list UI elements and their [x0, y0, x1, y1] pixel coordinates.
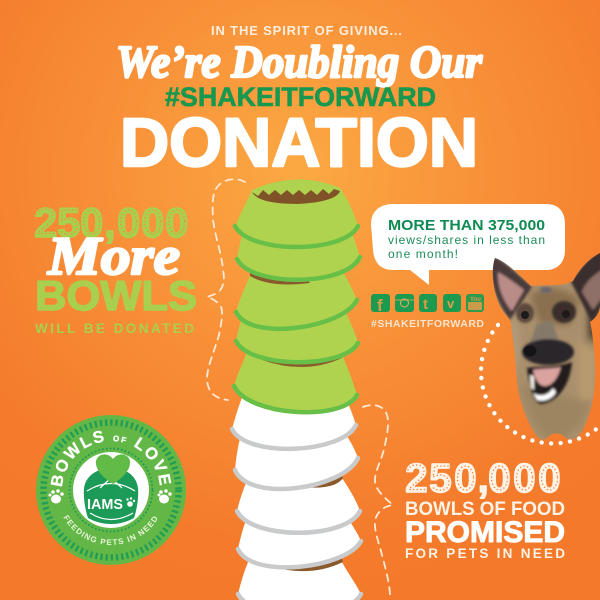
- badge dotted ring: [70, 448, 152, 532]
- logo wordmark: IAMS: [87, 497, 123, 513]
- logo bowl: [84, 468, 138, 524]
- icon: facebook: f: [377, 296, 383, 315]
- right stat: 250,000 bowls promised: [405, 455, 565, 561]
- icon: tumblr: t: [423, 296, 428, 313]
- food in bowl 5: [262, 350, 342, 367]
- badge white centre: [73, 452, 149, 528]
- speech bubble: [371, 204, 565, 285]
- dog eyes and nose: [521, 310, 570, 356]
- left stat caption: WILL BE DONATED: [35, 321, 194, 336]
- dog ears: [491, 250, 600, 322]
- badge tick ring: [44, 422, 178, 558]
- left stat number: 250,000: [34, 199, 188, 246]
- bubble shape: [371, 204, 565, 285]
- green bowl 2: [237, 228, 360, 280]
- hashtag under icons: #SHAKEITFORWARD: [371, 318, 484, 330]
- icon: vine: v: [447, 296, 455, 311]
- food in bowl 1: [252, 189, 340, 204]
- logo bowl lines: [86, 480, 136, 520]
- dog base coat: [492, 253, 600, 440]
- badge disc: [36, 415, 186, 565]
- dog mouth: [527, 362, 572, 404]
- white bowl 10: [238, 562, 361, 600]
- food in bowl 10: [270, 552, 343, 571]
- logo paw: [126, 497, 135, 507]
- white bowl 6: [232, 395, 356, 449]
- photo: german shepherd dog: [492, 253, 600, 440]
- title: donation: DONATION: [120, 104, 478, 181]
- logo bowl body: [84, 468, 138, 524]
- green bowl 1: [235, 179, 358, 247]
- title: hashtag: #SHAKEITFORWARD: [165, 82, 436, 112]
- white bowl 9: [238, 515, 361, 567]
- green bowl 5: [234, 352, 357, 412]
- left stat dotted inlay: [37, 209, 185, 234]
- dog body shading: [504, 289, 600, 440]
- stack of bowls: [232, 179, 361, 600]
- badge top arc text: BOWLS OF LOVE: [50, 430, 172, 487]
- right stat line 4: FOR PETS IN NEED: [405, 546, 565, 561]
- food in bowl 8: [303, 470, 343, 488]
- icon: right paw: [158, 489, 172, 504]
- food in bowl 3: [250, 270, 310, 284]
- dashed bracket: green bowls: [207, 179, 245, 400]
- bubble line 1: views/shares in less than: [388, 233, 545, 247]
- left stat script word: More: [47, 226, 180, 286]
- dog face markings: [516, 287, 576, 365]
- right stat number: 250,000: [405, 455, 561, 501]
- eyebrow text: IN THE SPIRIT OF GIVING...: [211, 23, 402, 38]
- title: script line: We’re Doubling Our: [116, 37, 482, 87]
- social icons: [371, 294, 484, 315]
- icon: youtube: You: [470, 297, 481, 303]
- logo heart: [96, 454, 130, 484]
- dashed bracket: white bowls: [363, 405, 393, 597]
- bubble heading: MORE THAN 375,000: [388, 217, 545, 234]
- green bowl 3: [236, 270, 357, 329]
- dotted circle behind dog: [481, 325, 600, 443]
- left stat bowls word: BOWLS: [35, 272, 197, 319]
- icon: left paw: [48, 489, 64, 504]
- bubble line 2: one month!: [388, 247, 458, 261]
- white bowl 8: [237, 478, 360, 533]
- right stat dotted inlay: [408, 465, 558, 490]
- badge: bowls of love: [36, 415, 186, 565]
- green bowl 4: [236, 310, 358, 362]
- left stat: 250,000 more bowls: [34, 199, 197, 336]
- badge bottom arc text: FEEDING PETS IN NEED: [64, 514, 157, 545]
- icon: instagram: [395, 294, 414, 312]
- white bowl 7: [235, 435, 358, 489]
- right stat line 3: PROMISED: [405, 516, 565, 549]
- right stat line 2: BOWLS OF FOOD: [405, 498, 565, 520]
